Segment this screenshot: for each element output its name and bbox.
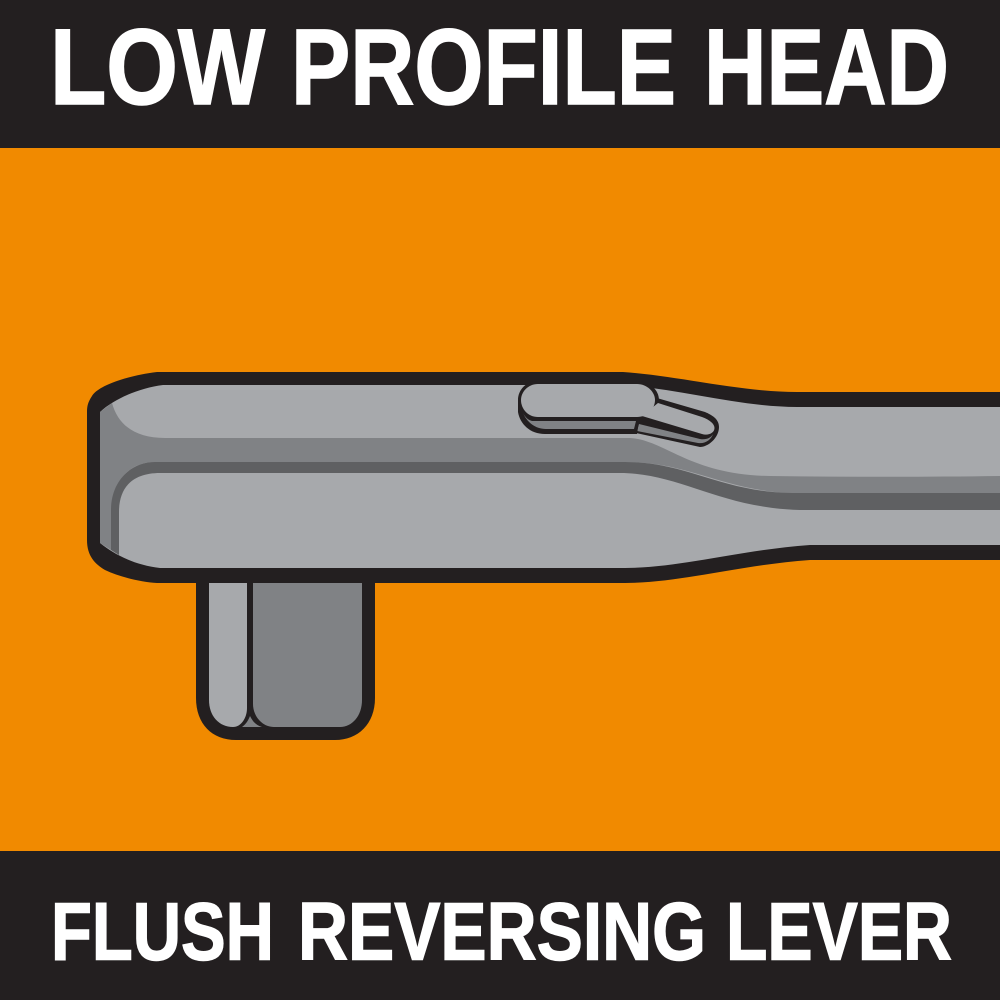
title: low profile head xyxy=(50,6,949,127)
subtitle: flush reversing lever: REVERSING xyxy=(298,886,706,978)
side shading band xyxy=(100,403,1000,550)
lever paddle xyxy=(518,381,659,434)
title: low profile head: PROFILE xyxy=(291,6,676,127)
dark groove band xyxy=(111,462,1000,555)
illustration: ratchet wrench xyxy=(87,372,1000,740)
subtitle: flush reversing lever: LEVER xyxy=(726,886,952,978)
reversing lever xyxy=(518,381,719,447)
square drive xyxy=(196,570,375,740)
title: low profile head: LOW xyxy=(50,6,265,127)
ratchet head and handle outline xyxy=(87,372,1000,583)
top banner xyxy=(0,0,1000,148)
subtitle: flush reversing lever: FLUSH xyxy=(51,886,274,978)
handle surface xyxy=(100,385,1000,568)
subtitle: flush reversing lever xyxy=(51,886,952,978)
lever tab xyxy=(633,396,719,447)
bottom banner xyxy=(0,851,1000,1000)
